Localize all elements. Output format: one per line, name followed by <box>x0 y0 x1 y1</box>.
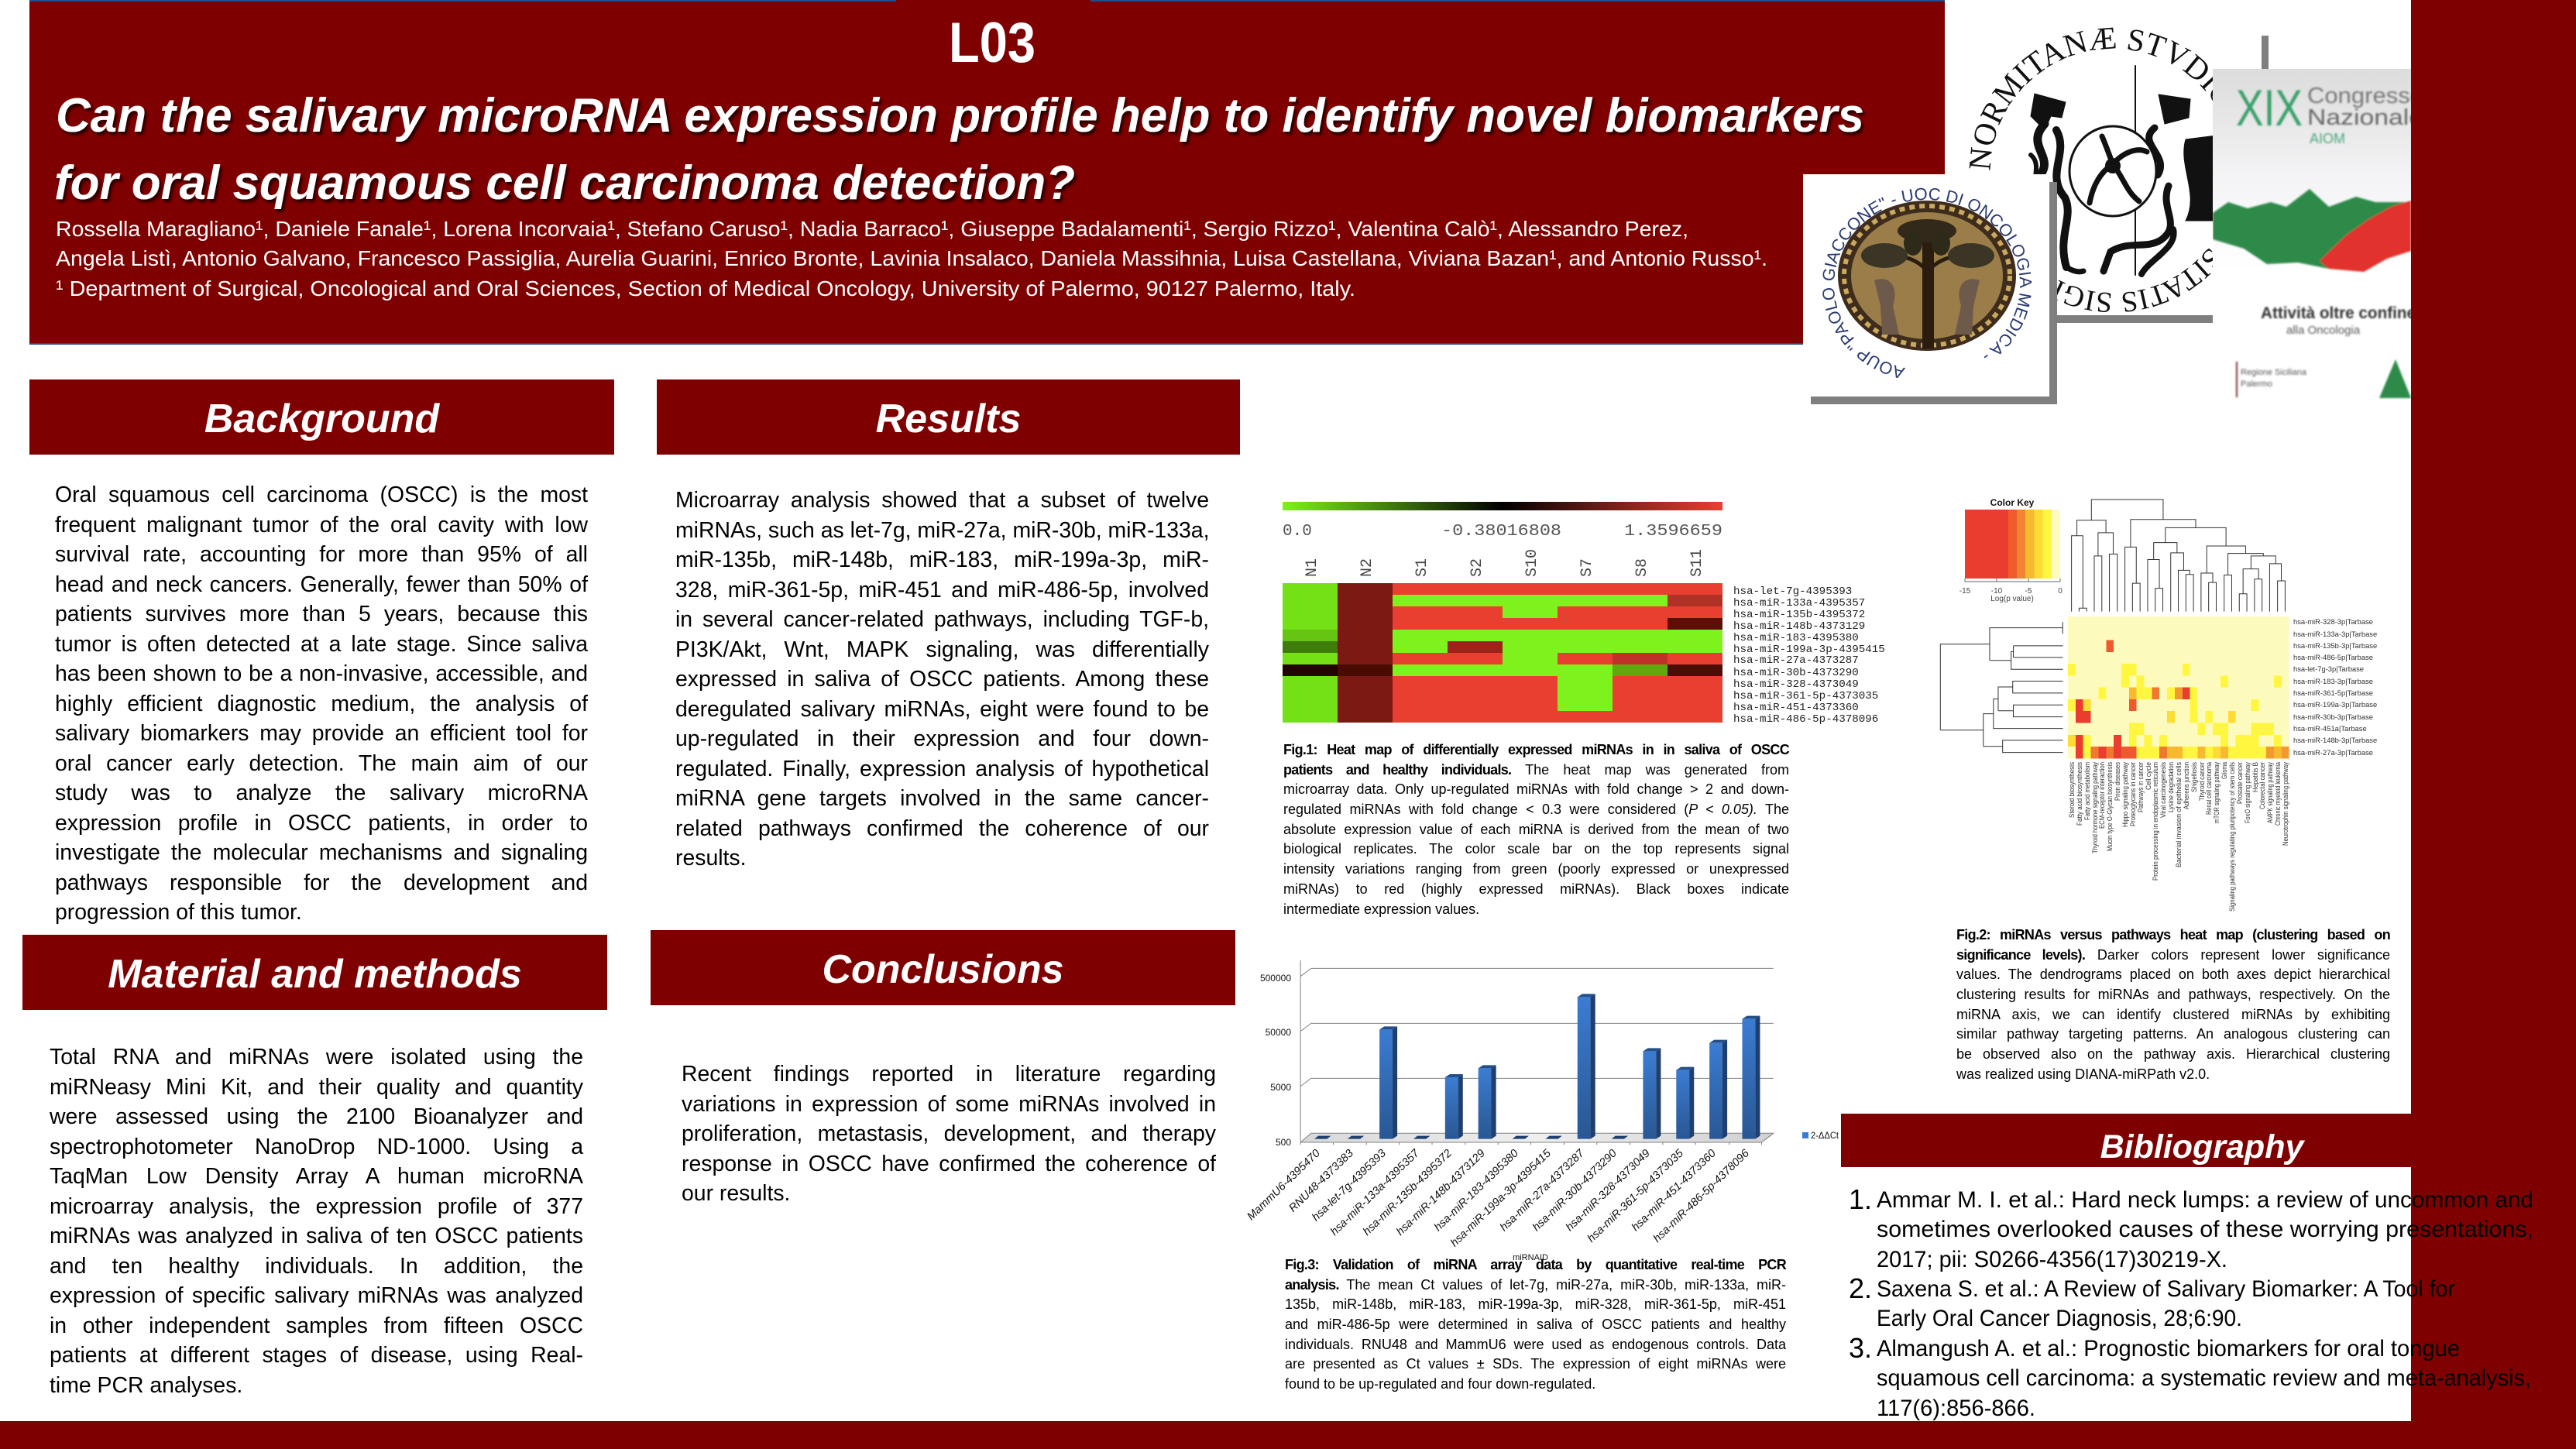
x axis title: miRNAID <box>1513 1253 1548 1262</box>
legend: 2-ΔΔCt <box>1811 1130 1839 1141</box>
pathway labels: Mucin type O-Glycan biosynthesis <box>2106 762 2114 851</box>
heading: Background: Background <box>204 397 439 441</box>
bibliography title and references: Ammar M. I. et al.: Hard neck lumps: a review of uncommon and <box>1877 1187 2533 1213</box>
caption: figure 1: Fig.1: Heat map of differentially expressed miRNAs in in saliva of OSCC <box>1283 742 1789 757</box>
miRNA labels: hsa-miR-183-3p|Tarbase <box>2293 677 2373 685</box>
logo: XIX national congress banner: Attività oltre confine <box>2261 304 2416 322</box>
miRNA row labels: hsa-miR-451-4373360 <box>1733 702 1859 714</box>
text: conclusions: proliferation, metastasis, development, and therapy <box>682 1121 1216 1146</box>
text: material and methods: expression of specific salivary miRNAs was analyzed <box>50 1283 583 1308</box>
bibliography title and references: sometimes overlooked causes of these worrying presentations, <box>1877 1217 2533 1242</box>
heat cells <box>2068 616 2289 758</box>
logo: XIX national congress banner: XIX <box>2236 79 2303 136</box>
x axis labels: hsa-miR-451-4373360 <box>1630 1147 1719 1234</box>
logo: University of Palermo seal <box>1969 28 2269 323</box>
pathway labels: mTOR signaling pathway <box>2213 762 2221 823</box>
caption: figure 1: intermediate expression values. <box>1283 901 1479 917</box>
heading: Conclusions <box>651 930 1235 1005</box>
miRNA dendrogram <box>1940 622 2063 753</box>
color key: 0 <box>2058 587 2063 596</box>
pathway labels: Thyroid cancer <box>2198 762 2206 801</box>
logo: University of Palermo seal: NORMITANÆ STVDIORVM <box>1969 28 2213 170</box>
heading: Results: Results <box>876 397 1021 441</box>
caption: figure 1: absolute expression value of each miRNA is derived from the mean of two <box>1283 822 1789 837</box>
logo: AOUP Paolo Giaccone medallion: AOUP "PAOLO GIACCONE" - UOC DI ONCOLOGIA MEDICA - <box>1822 187 2032 378</box>
color scale labels: 0.0 <box>1283 523 1312 541</box>
bibliography title and references: 1. <box>1849 1183 1872 1215</box>
text: material and methods: in other independent samples from fifteen OSCC <box>50 1313 583 1338</box>
text: results: miRNA gene targets involved in the same cancer- <box>675 786 1209 811</box>
pathway labels: Pathways in cancer <box>2137 762 2145 812</box>
x axis labels: hsa-miR-486-5p-4378096 <box>1651 1147 1752 1245</box>
bibliography title and references: Saxena S. et al.: A Review of Salivary Biomarker: A Tool for <box>1877 1276 2455 1302</box>
pathway labels: Hippo signaling pathway <box>2121 762 2129 827</box>
bibliography title and references: Bibliography <box>2100 1128 2305 1166</box>
heading: Material and methods: Material and methods <box>108 952 522 997</box>
logo: XIX national congress banner <box>2213 69 2423 400</box>
bibliography title and references: Almangush A. et al.: Prognostic biomarkers for oral tongue <box>1877 1336 2460 1361</box>
sample labels: S7 <box>1578 558 1596 577</box>
caption: figure 1: intensity variations ranging from green (poorly expressed or unexpressed <box>1283 861 1789 877</box>
miRNA row labels: hsa-let-7g-4395393 <box>1733 585 1852 598</box>
pathway labels: Bacterial invasion of epithelial cells <box>2175 762 2183 867</box>
miRNA row labels: hsa-miR-27a-4373287 <box>1733 654 1859 667</box>
pathway labels: Prion diseases <box>2114 762 2121 801</box>
text: conclusions: our results. <box>682 1181 790 1206</box>
text: background: survival rate, accounting for more than 95% of all <box>55 542 588 567</box>
pathway labels: Signaling pathways regulating pluripotency of stem cells <box>2228 762 2236 912</box>
text: conclusions <box>682 1062 1216 1206</box>
text: background: pathways responsible for the development and <box>55 870 588 895</box>
pathway labels: Protein processing in endoplasmic reticulum <box>2152 762 2159 881</box>
miRNA row labels: hsa-miR-30b-4373290 <box>1733 667 1859 679</box>
pathway labels: Shigellosis <box>2190 762 2198 792</box>
pathway labels: Fatty acid biosynthesis <box>2076 762 2083 826</box>
tall bars <box>1379 994 1760 1139</box>
text: results: expressed in saliva of OSCC patients. Among these <box>675 667 1209 692</box>
pathway labels: Renal cell carcinoma <box>2205 762 2213 815</box>
caption: figure 1 <box>1283 742 1789 917</box>
text: conclusions: variations in expression of some miRNAs involved in <box>682 1092 1216 1117</box>
pathway labels: AMPK signaling pathway <box>2266 762 2274 823</box>
miRNA labels: hsa-miR-451a|Tarbase <box>2293 724 2367 733</box>
authors and affiliation: Angela Listì, Antonio Galvano, Francesco Passiglia, Aurelia Guarini, Enrico Bronte, Lavinia Insalaco, Daniela Massihnia, Luisa Castellana, Viviana Bazan¹, and Antonio Russo¹. <box>56 246 1767 270</box>
y axis labels: 500 <box>1276 1137 1291 1148</box>
sample labels: N2 <box>1358 558 1376 577</box>
bottom bar <box>0 1421 2576 1449</box>
pathway labels: Neurotrophin signaling pathway <box>2282 762 2289 846</box>
flat bars <box>1314 1136 1628 1139</box>
pathway labels: Prostate cancer <box>2236 762 2244 804</box>
caption: figure 2: significance levels). Darker colors represent lower significance <box>1956 947 2390 963</box>
text: conclusions: Recent findings reported in literature regarding <box>682 1062 1216 1087</box>
caption: figure 3: Fig.3: Validation of miRNA array data by quantitative real-time PCR <box>1285 1257 1786 1272</box>
bibliography title and references: 2. <box>1849 1272 1872 1304</box>
heading: Conclusions: Conclusions <box>822 947 1064 992</box>
heading: Background <box>29 379 614 455</box>
caption: figure 3: and miR-486-5p were determined in saliva of OSCC patients and healthy <box>1285 1317 1786 1332</box>
miRNA row labels: hsa-miR-199a-3p-4395415 <box>1733 644 1885 656</box>
heading: Material and methods <box>22 935 607 1010</box>
text: results: miR-135b, miR-148b, miR-183, miR-199a-3p, miR- <box>675 548 1209 572</box>
pathway labels <box>2068 762 2289 912</box>
y axis labels: 5000 <box>1270 1082 1291 1093</box>
heat cells <box>1283 583 1722 723</box>
pathway labels: Glioma <box>2221 762 2228 779</box>
miRNA row labels: hsa-miR-328-4373049 <box>1733 678 1859 691</box>
caption: figure 2: was realized using DIANA-miRPath v2.0. <box>1956 1066 2210 1082</box>
caption: figure 1: biological replicates. The color scale bar on the top represents signal <box>1283 841 1789 857</box>
x axis labels: hsa-miR-30b-4373290 <box>1530 1147 1619 1234</box>
text: results: Microarray analysis showed that a subset of twelve <box>675 488 1209 513</box>
miRNA row labels: hsa-miR-133a-4395357 <box>1733 597 1865 609</box>
caption: figure 3 <box>1285 1257 1786 1392</box>
miRNA labels: hsa-miR-486-5p|Tarbase <box>2293 653 2373 661</box>
text: background: oral cancer early detection. The main aim of our <box>55 751 588 776</box>
miRNA row labels: hsa-miR-135b-4395372 <box>1733 609 1865 621</box>
title: Can the salivary microRNA expression profile help to identify novel biomarkers <box>56 89 1864 142</box>
miRNA labels: hsa-let-7g-3p|Tarbase <box>2293 664 2364 673</box>
text: results: miRNAs, such as let-7g, miR-27a, miR-30b, miR-133a, <box>675 517 1209 542</box>
logo: University of Palermo seal: SITATIS SIGI <box>2057 248 2213 313</box>
text: background: progression of this tumor. <box>55 900 302 925</box>
miRNA labels: hsa-miR-27a-3p|Tarbase <box>2293 748 2373 757</box>
caption: figure 2 <box>1956 927 2390 1082</box>
pathway labels: Hepatitis B <box>2251 762 2259 792</box>
color scale labels <box>1283 523 1722 541</box>
caption: figure 1: regulated miRNAs with fold change < 0.3 were considered (P < 0.05). The <box>1283 802 1789 817</box>
miRNA labels: hsa-miR-361-5p|Tarbase <box>2293 688 2373 697</box>
logo: XIX national congress banner: alla Oncologia <box>2286 324 2361 337</box>
color scale labels: 1.3596659 <box>1624 523 1722 541</box>
text: results: related pathways confirmed the coherence of our <box>675 816 1209 841</box>
text: background: frequent malignant tumor of the oral cavity with low <box>55 513 588 537</box>
heading: Results <box>657 379 1240 455</box>
caption: figure 2: values. The dendrograms placed on both axes depict hierarchical <box>1956 967 2390 982</box>
text: conclusions: response in OSCC have confirmed the coherence of <box>682 1151 1216 1176</box>
text: background: Oral squamous cell carcinoma (OSCC) is the most <box>55 482 588 507</box>
sample labels <box>1303 549 1706 577</box>
miRNA row labels: hsa-miR-361-5p-4373035 <box>1733 690 1878 702</box>
text: results: 328, miR-361-5p, miR-451 and miR-486-5p, involved <box>675 578 1209 603</box>
miRNA labels: hsa-miR-328-3p|Tarbase <box>2293 617 2373 626</box>
text: results: regulated. Finally, expression analysis of hypothetical <box>675 756 1209 781</box>
header banner <box>29 0 1945 345</box>
caption: figure 2: Fig.2: miRNAs versus pathways heat map (clustering based on <box>1956 927 2390 943</box>
caption: figure 2: miRNA axis, we can identify clustered miRNAs by exhibiting <box>1956 1007 2390 1022</box>
caption: figure 3: are presented as Ct values ± SDs. The expression of eight miRNAs were <box>1285 1356 1786 1372</box>
bibliography title and references: squamous cell carcinoma: a systematic review and meta-analysis, <box>1877 1365 2531 1391</box>
pathway labels: Fatty acid metabolism <box>2083 762 2091 820</box>
y axis labels: 50000 <box>1266 1027 1291 1038</box>
y axis labels <box>1260 973 1291 1148</box>
text: background: expression profile in OSCC patients, in order to <box>55 810 588 835</box>
color key: -5 <box>2025 587 2032 596</box>
text: background: tumor is often detected at a late stage. Since saliva <box>55 632 588 657</box>
pathway labels: Viral carcinogenesis <box>2159 762 2167 818</box>
pathway labels: Steroid biosynthesis <box>2068 762 2076 818</box>
pathway labels: Adherens junction <box>2183 762 2190 809</box>
figure 3: validation bar chart <box>1245 960 1839 1262</box>
pathway labels: Proteoglycans in cancer <box>2129 762 2137 826</box>
x axis labels: hsa-miR-133a-4395357 <box>1328 1147 1422 1238</box>
color key: -10 <box>1991 587 2003 596</box>
x axis labels: hsa-miR-27a-4373287 <box>1498 1147 1587 1234</box>
pathway labels: Lysine degradation <box>2167 762 2175 812</box>
pathway labels: FoxO signaling pathway <box>2244 762 2251 823</box>
text: material and methods: patients at different stages of disease, using Real- <box>50 1343 583 1368</box>
x axis labels: MammU6-4395470 <box>1245 1147 1323 1223</box>
color key: -15 <box>1959 587 1971 596</box>
miRNA row labels: hsa-miR-148b-4373129 <box>1733 620 1865 633</box>
authors and affiliation: ¹ Department of Surgical, Oncological and Oral Sciences, Section of Medical Oncology, University of Palermo, 90127 Palermo, Italy. <box>56 276 1355 300</box>
sample labels: S1 <box>1413 558 1431 577</box>
text: material and methods: miRNeasy Mini Kit, and their quality and quantity <box>50 1075 583 1100</box>
text: results: deregulated salivary miRNAs, eight were found to be <box>675 697 1209 722</box>
pathway labels: Colorectal cancer <box>2258 762 2266 809</box>
caption: figure 1: microarray data. Only up-regulated miRNAs with fold change > 2 and down- <box>1283 781 1789 797</box>
text: material and methods: spectrophotometer NanoDrop ND-1000. Using a <box>50 1134 583 1159</box>
color key: Color Key <box>1990 497 2035 508</box>
x axis labels: hsa-miR-148b-4373129 <box>1394 1147 1488 1238</box>
figure 2: pathways heat map <box>1940 497 2377 912</box>
caption: figure 2: similar pathway targeting patterns. An analogous clustering can <box>1956 1026 2390 1042</box>
x axis labels: hsa-miR-135b-4395372 <box>1361 1147 1455 1238</box>
pathway dendrogram <box>2072 500 2285 612</box>
text: background <box>55 482 589 925</box>
authors and affiliation: Rossella Maragliano¹, Daniele Fanale¹, Lorena Incorvaia¹, Stefano Caruso¹, Nadia Barraco¹, Giuseppe Badalamenti¹, Sergio Rizzo¹, Valentina Calò¹, Alessandro Perez, <box>56 217 1688 241</box>
miRNA labels: hsa-miR-135b-3p|Tarbase <box>2293 641 2377 650</box>
logo: XIX national congress banner: Palermo <box>2241 379 2272 389</box>
logo: XIX national congress banner: Nazionale <box>2307 105 2423 130</box>
title <box>54 89 1864 210</box>
pathway labels: Cell cycle <box>2145 762 2152 790</box>
color scale labels: -0.38016808 <box>1441 523 1561 541</box>
color key: Log(p value) <box>1990 595 2034 603</box>
caption: figure 2: clustering results for miRNAs and pathways, respectively. On the <box>1956 987 2390 1002</box>
heading: Bibliography <box>1841 1114 2411 1167</box>
x axis labels: hsa-let-7g-4395393 <box>1310 1147 1389 1224</box>
text: background: investigate the molecular mechanisms and signaling <box>55 840 588 865</box>
y axis labels: 500000 <box>1260 973 1291 984</box>
x axis labels: RNU48-4373383 <box>1286 1147 1356 1214</box>
caption: figure 3: 135b, miR-148b, miR-183, miR-199a-3p, miR-328, miR-361-5p, miR-451 <box>1285 1296 1786 1312</box>
text: results: up-regulated in their expression and four down- <box>675 726 1209 751</box>
x axis labels <box>1245 1147 1752 1249</box>
logo: XIX national congress banner: Regione Siciliana <box>2241 368 2307 377</box>
x axis labels: hsa-miR-183-4395380 <box>1432 1147 1521 1234</box>
text: material and methods: TaqMan Low Density Array A human microRNA <box>50 1164 583 1189</box>
miRNA labels <box>2293 617 2377 757</box>
authors and affiliation <box>56 217 1767 300</box>
color scale bar <box>1283 502 1722 510</box>
text: material and methods: microarray analysis, the expression profile of 377 <box>50 1194 583 1219</box>
caption: figure 1: miRNAs) to red (highly expressed miRNAs). Black boxes indicate <box>1283 881 1789 897</box>
text: results: in several cancer-related pathways, including TGF-b, <box>675 607 1209 632</box>
text: background: study was to analyze the salivary microRNA <box>55 781 588 805</box>
text: material and methods: miRNAs was analyzed in saliva of ten OSCC patients <box>50 1224 583 1248</box>
figure 1: microRNA heat map <box>1283 502 1885 726</box>
warrior <box>2159 94 2190 124</box>
bibliography title and references: 3. <box>1849 1332 1872 1364</box>
text: background: head and neck cancers. Generally, fewer than 50% of <box>55 572 588 596</box>
text: background: salivary biomarkers may provide an efficient tool for <box>55 721 588 746</box>
bibliography title and references: Early Oral Cancer Diagnosis, 28;6:90. <box>1877 1306 2242 1331</box>
title: for oral squamous cell carcinoma detection? <box>54 156 1075 210</box>
sample labels: S2 <box>1468 558 1486 577</box>
text: material and methods <box>50 1045 584 1397</box>
axes and grid <box>1300 960 1774 1145</box>
text: results: PI3K/Akt, Wnt, MAPK signaling, was differentially <box>675 637 1209 661</box>
miRNA labels: hsa-miR-148b-3p|Tarbase <box>2293 736 2377 744</box>
pathway labels: Chronic myeloid leukemia <box>2274 762 2282 826</box>
text: results: results. <box>675 846 747 870</box>
griffin <box>2031 66 2217 275</box>
caption: figure 3: analysis. The mean Ct values of let-7g, miR-27a, miR-30b, miR-133a, miR- <box>1285 1277 1786 1293</box>
miRNA labels: hsa-miR-199a-3p|Tarbase <box>2293 700 2377 709</box>
logo: XIX national congress banner: AIOM <box>2310 131 2345 146</box>
sample labels: S8 <box>1633 558 1651 577</box>
top blue rule right <box>1091 0 1945 2</box>
color key <box>1959 497 2063 603</box>
x axis labels: hsa-miR-199a-3p-4395415 <box>1448 1147 1554 1249</box>
pathway labels: ECM-receptor interaction <box>2098 762 2106 829</box>
text: material and methods: time PCR analyses. <box>50 1372 242 1397</box>
text: material and methods: Total RNA and miRNAs were isolated using the <box>50 1045 583 1070</box>
header text <box>54 12 1864 300</box>
trinacria <box>2069 126 2156 216</box>
right side bar <box>2411 0 2576 1449</box>
caption: figure 3: individuals. RNU48 and MammU6 were used as endogenous controls. Data <box>1285 1337 1786 1352</box>
miRNA labels: hsa-miR-133a-3p|Tarbase <box>2293 630 2377 638</box>
poster code: L03 <box>949 12 1036 74</box>
x axis labels: hsa-miR-361-5p-4373035 <box>1585 1147 1686 1245</box>
text: material and methods: were assessed using the 2100 Bioanalyzer and <box>50 1104 583 1129</box>
text: background: patients survives more than 5 years, because this <box>55 602 588 627</box>
pathway labels: Thyroid hormone signaling pathway <box>2091 762 2099 853</box>
caption: figure 2: be observed also on the pathway axis. Hierarchical clustering <box>1956 1046 2390 1062</box>
miRNA row labels: hsa-miR-486-5p-4378096 <box>1733 713 1878 726</box>
caption: figure 1: patients and healthy individuals. The heat map was generated from <box>1283 762 1789 778</box>
miRNA labels: hsa-miR-30b-3p|Tarbase <box>2293 712 2373 721</box>
top blue rule left <box>29 0 896 2</box>
text: material and methods: and ten healthy individuals. In addition, the <box>50 1253 583 1278</box>
text: background: highly efficient diagnostic medium, the analysis of <box>55 691 588 716</box>
bibliography title and references: 117(6):856-866. <box>1877 1396 2035 1421</box>
caption: figure 3: found to be up-regulated and four down-regulated. <box>1285 1376 1595 1392</box>
sample labels: S10 <box>1523 549 1541 577</box>
sample labels: N1 <box>1303 558 1321 577</box>
sample labels: S11 <box>1688 549 1706 577</box>
bibliography title and references: 2017; pii: S0266-4356(17)30219-X. <box>1877 1247 2227 1272</box>
miRNA row labels: hsa-miR-183-4395380 <box>1733 632 1859 644</box>
text: background: has been shown to be a non-invasive, accessible, and <box>55 661 588 686</box>
x axis labels: hsa-miR-328-4373049 <box>1564 1147 1653 1234</box>
miRNA row labels <box>1733 585 1885 726</box>
logo: XIX national congress banner: Congresso <box>2307 84 2423 108</box>
text: results <box>675 488 1209 870</box>
